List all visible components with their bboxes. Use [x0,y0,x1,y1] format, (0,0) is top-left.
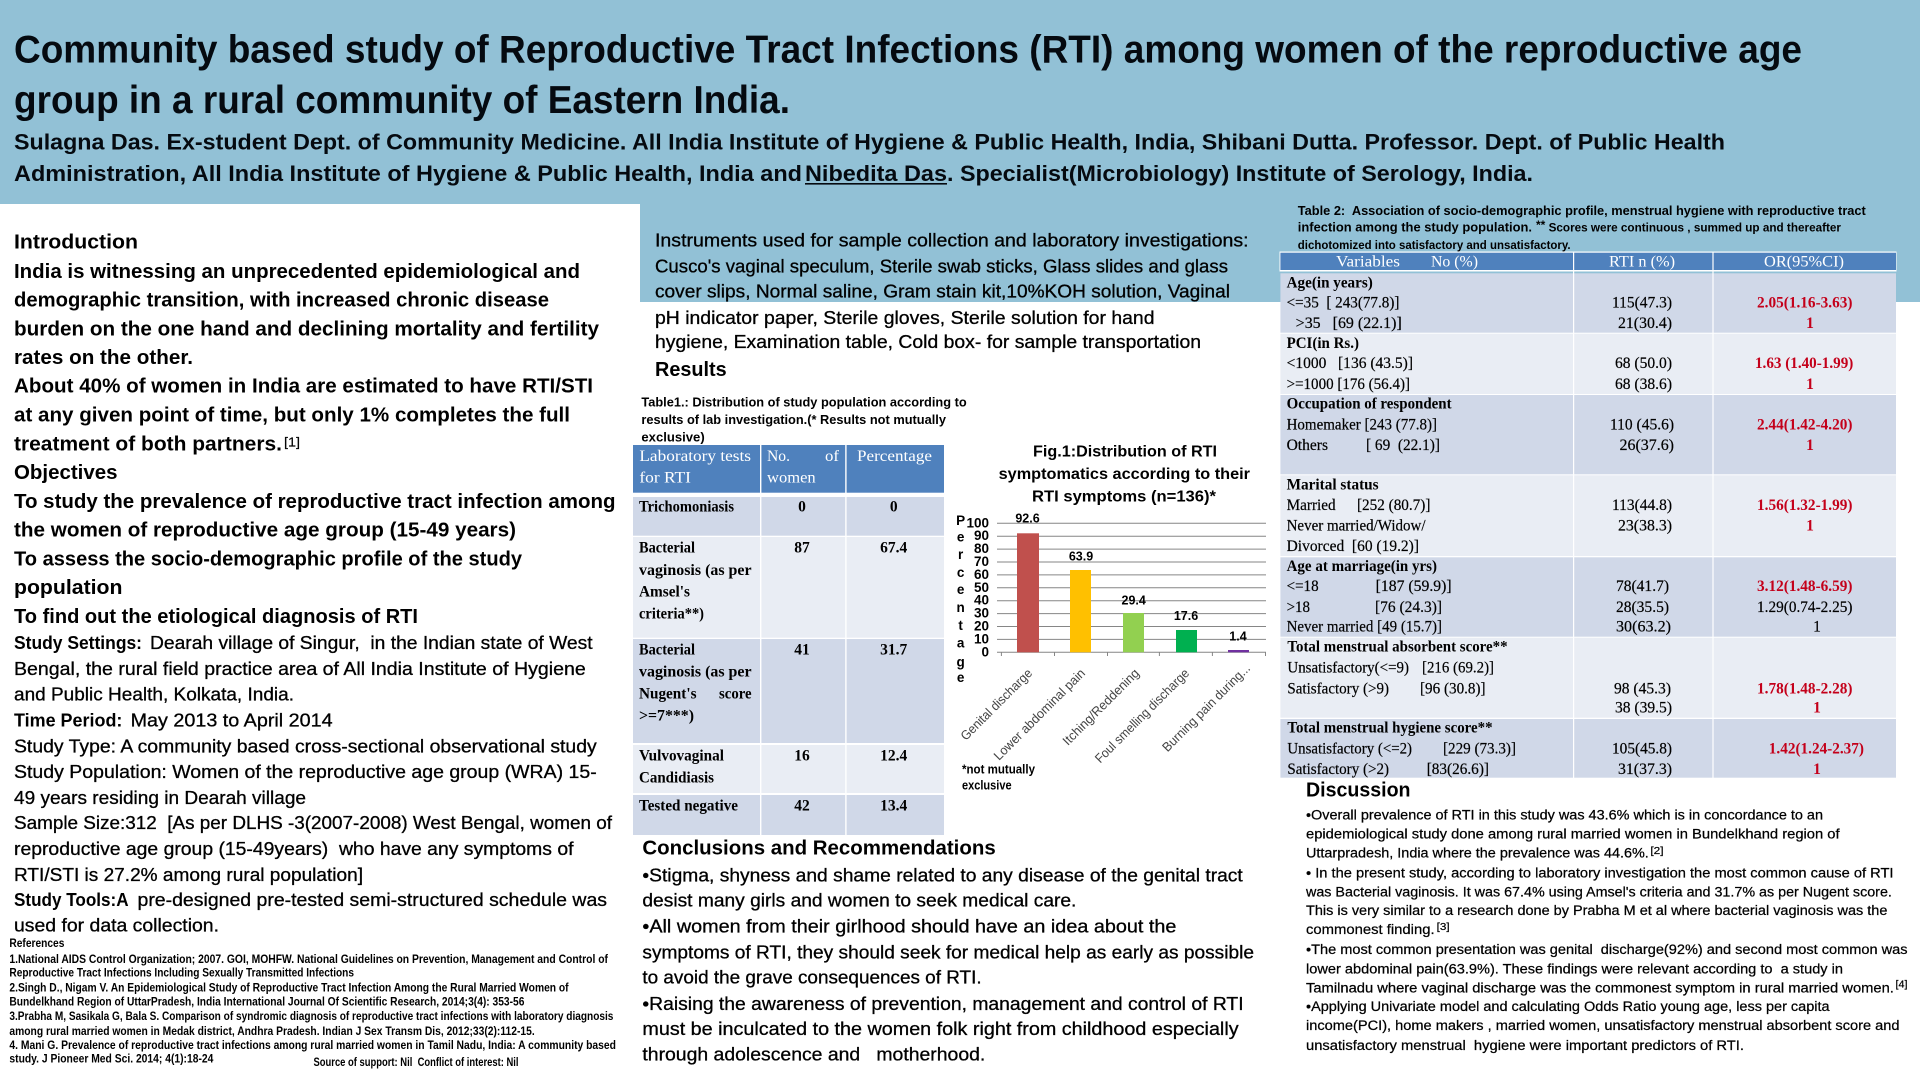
y axis ticks: 40 [974,593,989,608]
figure 1 title [999,444,1250,506]
x axis labels: Itching/Reddening [1059,666,1142,748]
text block: conclusions: symptoms of RTI, they should seek for medical help as early as possible [642,941,1254,962]
x axis labels [957,661,1253,766]
references: Reproductive Tract Infections Including Sexually Transmitted Infections [9,968,354,980]
text block: methods: and Public Health, Kolkata, India. [14,684,294,705]
data labels: 29.4 [1122,594,1146,608]
row group: per capita income: 68 (50.0) [1615,355,1672,372]
text block: discussion: lower abdominal pain(63.9%). These findings were relevant according to a study in [1306,961,1843,977]
panel: middle column [633,230,1266,1065]
text block: introduction: [1] [284,435,300,450]
y axis ticks: 20 [974,618,989,634]
authors [14,130,1725,186]
row group: menstrual absorbent score: [96 (30.8)] [1420,680,1486,697]
table 1: Candidiasis [639,770,714,787]
text block: introduction: treatment of both partners. [14,433,282,456]
row group: per capita income: 68 (38.6) [1615,376,1672,393]
row group: marital status [1287,476,1852,555]
y axis ticks: 10 [974,631,989,646]
row group: age: 21(30.4) [1618,315,1672,332]
text block: methods: Time Period: [14,710,122,731]
y axis title: e [957,530,965,545]
y axis ticks: 100 [966,515,989,530]
text block: conclusions: •Stigma, shyness and shame related to any disease of the genital tract [642,865,1243,886]
text block: discussion: •Overall prevalence of RTI in this study was 43.6% which is in concordance to an [1306,807,1823,823]
chart footnote: exclusive [962,778,1012,792]
row group: age: 2.05(1.16-3.63) [1757,294,1852,311]
text block: instruments: Instruments used for sample collection and laboratory investigations: [655,230,1249,251]
references: among rural married women in Medak district, Andhra Pradesh. Indian J Sex Transm Dis, 2012;33(2):112-15. [9,1026,535,1038]
title: group in a rural community of Eastern India. [14,79,790,122]
row group: menstrual absorbent score: Satisfactory (>9) [1287,680,1389,697]
text block: introduction: burden on the one hand and declining mortality and fertility [14,318,600,341]
row group: per capita income: 1.63 (1.40-1.99) [1755,355,1853,372]
row group: marital status: 1.56(1.32-1.99) [1757,497,1852,514]
table 1: 13.4 [880,798,908,815]
text block: methods: Sample Size:312 [As per DLHS -3(2007-2008) West Bengal, women of [14,812,613,833]
references [9,938,616,1066]
table 1: for RTI [639,470,691,487]
row group: age at marriage: 1 [1813,619,1821,636]
table 1: Tested negative [639,798,738,815]
heading: Objectives: Objectives [14,461,118,484]
text block: methods: Study Population: Women of the reproductive age group (WRA) 15- [14,761,597,782]
source of support note: Source of support: Nil Conflict of interest: Nil [314,1057,518,1069]
table 1: Bacterial [639,540,696,557]
table 2 [1280,252,1896,778]
figure 1 title: Fig.1:Distribution of RTI [1033,444,1217,461]
table 1: Bacterial [639,642,696,659]
table 2 header row: No (%) [1431,254,1478,271]
text block: discussion: was Bacterial vaginosis. It was 67.4% using Amsel's criteria and 31.7% as per Nugent score. [1305,884,1892,900]
references: 3.Prabha M, Sasikala G, Bala S. Comparison of syndromic diagnosis of reproductive tract infections with laboratory diagnosis [9,1011,613,1023]
references: 1.National AIDS Control Organization; 2007. GOI, MOHFW. National Guidelines on Prevention, Management and Control of [9,954,608,966]
row group: marital status: Divorced [60 (19.2)] [1287,538,1419,555]
table 1 caption: Table1.: Distribution of study population according to [641,396,967,410]
references: 4. Mani G. Prevalence of reproductive tract infections among rural married women in Tamil Nadu, India: A community based [9,1040,616,1052]
row group: age: 115(47.3) [1612,294,1672,311]
table 1: criteria**) [639,606,704,623]
table 1: 16 [794,748,810,765]
table 2 caption [1298,204,1867,252]
row group: menstrual hygiene score: [229 (73.3)] [1443,740,1516,757]
text block: discussion: unsatisfactory menstrual hygiene were important predictors of RTI. [1306,1038,1744,1054]
table 1: Nugent's [639,686,696,703]
table 1: 12.4 [880,748,908,765]
row group: age at marriage: 30(63.2) [1616,619,1671,636]
row group: age at marriage: Never married [49 (15.7)] [1287,619,1442,636]
row group: menstrual hygiene score: 1.42(1.24-2.37) [1769,740,1864,757]
row group: menstrual absorbent score: Unsatisfactory(<=9) [1287,659,1409,676]
table 1 caption: exclusive) [641,431,705,445]
row group: menstrual absorbent score [1287,639,1852,717]
row group: per capita income: >=1000 [176 (56.4)] [1287,376,1410,393]
text block: discussion: income(PCI), home makers , married women, unsatisfactory menstrual absorbent score and [1306,1018,1900,1034]
text block: methods: Study Type: A community based cross-sectional observational study [14,736,597,757]
text block: conclusions: must be inculcated to the women folk right from childhood especially [642,1018,1239,1039]
text block: discussion: •Applying Univariate model and calculating Odds Ratio young age, less per capita [1306,999,1830,1015]
row group: menstrual hygiene score: [83(26.6)] [1427,761,1489,778]
table 1 caption [641,396,967,445]
table 1: vaginosis (as per [639,664,752,681]
row group: menstrual hygiene score: 105(45.8) [1612,740,1672,757]
text block: objectives: population [14,576,122,599]
data labels: 17.6 [1174,609,1198,623]
text block: objectives: To assess the socio-demographic profile of the study [14,548,523,571]
authors: . Specialist(Microbiology) Institute of Serology, India. [947,161,1533,186]
row group: occupation: 1 [1806,437,1814,454]
chart footnote [962,762,1035,792]
text block: methods: RTI/STI is 27.2% among rural population] [14,864,363,885]
text block: discussion: •The most common presentation was genital discharge(92%) and second most common was [1306,942,1908,958]
row group: marital status: Never married/Widow/ [1287,518,1426,535]
table 2 caption: ** [1536,218,1546,232]
title [14,29,1802,122]
text block: objectives: To find out the etiological diagnosis of RTI [14,605,418,628]
row group: menstrual hygiene score: 1 [1813,761,1821,778]
text block: methods: used for data collection. [14,915,219,936]
y axis ticks: 60 [974,567,989,582]
text block: instruments: Cusco's vaginal speculum, Sterile swab sticks, Glass slides and glass [655,256,1228,277]
title: Community based study of Reproductive Tract Infections (RTI) among women of the reproductive age [14,29,1802,72]
text block: instruments: cover slips, Normal saline, Gram stain kit,10%KOH solution, Vaginal [655,280,1230,301]
table 1: No. [767,448,790,465]
text block: conclusions: •Raising the awareness of prevention, management and control of RTI [642,993,1244,1014]
text block: discussion [1305,807,1908,1054]
y axis title [956,513,965,685]
row group: per capita income: <1000 [136 (43.5)] [1287,355,1413,372]
text block: methods: May 2013 to April 2014 [131,710,333,731]
text block: instruments: hygiene, Examination table, Cold box- for sample transportation [655,331,1201,352]
row group: age at marriage: 28(35.5) [1616,599,1669,616]
authors: Administration, All India Institute of Hygiene & Public Health, India and [14,161,802,186]
figure 1 title: symptomatics according to their [999,466,1250,483]
y axis title: e [957,670,965,685]
text block: discussion: Uttarpradesh, India where the prevalence was 44.6%. [1306,846,1649,862]
table 1: >=7***) [639,708,694,725]
data labels: 92.6 [1015,512,1040,526]
text block: methods: 49 years residing in Dearah village [14,787,306,808]
heading: Results: Results [655,359,727,381]
data labels: 63.9 [1069,550,1093,564]
text block: introduction: demographic transition, with increased chronic disease [14,289,549,312]
text block: introduction: rates on the other. [14,346,193,369]
row group: age at marriage: Age at marriage(in yrs) [1287,558,1437,575]
data labels: 1.4 [1229,630,1247,644]
table 1: women [767,470,816,487]
text block: introduction: About 40% of women in India are estimated to have RTI/STI [14,375,593,398]
authors: Sulagna Das. Ex-student Dept. of Community Medicine. All India Institute of Hygiene & Public Health, India, Shibani Dutta. Professor. Dept. of Public Health [14,130,1725,154]
text block: conclusions: to avoid the grave consequences of RTI. [642,966,982,987]
row group: marital status: Marital status [1287,476,1379,493]
row group: menstrual absorbent score: 38 (39.5) [1615,700,1672,717]
row group: age: 1 [1806,315,1814,332]
table 2 header row: RTI n (%) [1609,254,1675,271]
table 1 [633,445,944,835]
y axis ticks [966,515,989,659]
y axis title: n [956,600,965,615]
bar chart [956,512,1266,766]
references: study. J Pioneer Med Sci. 2014; 4(1):18-24 [9,1054,214,1066]
table 1: 0 [890,499,898,516]
references: 2.Singh D., Nigam V. An Epidemiological Study of Reproductive Tract Infection Among the Rural Married Women of [9,983,569,995]
text block: methods [14,632,613,936]
row group: menstrual absorbent score: 98 (45.3) [1614,680,1671,697]
table 1: Laboratory tests [639,448,751,465]
table 2 caption: Scores were continuous , summed up and thereafter [1549,223,1842,235]
row group: marital status: 23(38.3) [1618,518,1672,535]
x axis labels: Burning pain during... [1159,661,1253,755]
table 2 caption: infection among the study population. [1298,221,1532,235]
text block: objectives [14,490,616,628]
text block: methods: reproductive age group (15-49years) who have any symptoms of [14,838,574,859]
chart footnote: *not mutually [962,762,1035,776]
table 1: Trichomoniasis [639,499,734,516]
row group: occupation [1287,396,1852,454]
text block: introduction [14,260,600,456]
row group: age at marriage: 1.29(0.74-2.25) [1757,599,1852,616]
row group: age [1287,274,1852,332]
text block: introduction: at any given point of time, but only 1% completes the full [14,404,570,427]
row group: per capita income: 1 [1806,376,1814,393]
row group: menstrual hygiene score [1287,720,1864,778]
table 1: 41 [794,642,810,659]
y axis title: t [958,618,963,633]
table 2 caption: dichotomized into satisfactory and unsatisfactory. [1298,240,1571,252]
y axis ticks: 50 [974,580,989,595]
row group: age at marriage: >18 [1287,599,1310,616]
data labels [1015,512,1247,644]
row group: menstrual hygiene score: Satisfactory (>2) [1287,761,1389,778]
table 1: Amsel's [639,584,690,601]
row group: menstrual hygiene score: 31(37.3) [1618,761,1672,778]
row group: menstrual hygiene score: Total menstrual hygiene score** [1287,720,1493,737]
bars [1017,533,1249,652]
table 2 header row: OR(95%CI) [1764,254,1844,271]
row group: marital status: 113(44.8) [1612,497,1672,514]
y axis ticks: 90 [974,528,989,543]
text block: objectives: the women of reproductive age group (15-49 years) [14,519,516,542]
table 2 header row [1336,254,1844,271]
figure 1 title: RTI symptoms (n=136)* [1032,489,1217,506]
table 1 caption: results of lab investigation.(* Results not mutually [641,413,946,427]
heading: Conclusions and Recommendations: Conclusions and Recommendations [642,837,996,859]
heading: Introduction: Introduction [14,230,138,253]
text block: instruments [655,230,1249,352]
text block: conclusions: desist many girls and women to seek medical care. [642,890,1076,911]
row group: age at marriage: 3.12(1.48-6.59) [1757,578,1852,595]
x axis labels: Foul smelling discharge [1092,666,1192,766]
row group: occupation: Others [1287,437,1328,454]
text block: discussion: epidemiological study done among rural married women in Bundelkhand region of [1306,826,1840,842]
references: References [9,938,64,950]
text block: methods: pre-designed pre-tested semi-structured schedule was [138,889,607,910]
y axis ticks: 70 [974,554,989,569]
text block: discussion: [2] [1650,845,1664,857]
table 1: 0 [798,499,806,516]
table 1: 42 [794,798,810,815]
row group: occupation: 110 (45.6) [1610,416,1674,433]
text block: discussion: commonest finding. [1306,922,1435,938]
row group: age at marriage: 78(41.7) [1616,578,1669,595]
y axis ticks: 30 [974,606,989,621]
row group: age at marriage [1287,558,1852,636]
row group: age: <=35 [ 243(77.8)] [1287,294,1399,311]
row group: age at marriage: [76 (24.3)] [1375,599,1442,616]
row group: age at marriage: [187 (59.9)] [1376,578,1452,595]
table 2 caption: Table 2: Association of socio-demographic profile, menstrual hygiene with reproductive tract [1298,204,1867,218]
text block: discussion: Tamilnadu where vaginal discharge was the commonest symptom in rural married women. [1306,980,1894,996]
heading: Discussion: Discussion [1306,780,1410,802]
table 1: of [825,448,840,465]
text block: discussion: [3] [1437,921,1450,933]
authors: Nibedita Das [805,161,947,186]
y axis title: P [956,513,965,528]
text block: methods: Study Settings: [14,632,142,653]
row group: occupation: 26(37.6) [1620,437,1674,454]
table 1: Vulvovaginal [639,748,725,765]
table 1: score [719,686,752,703]
y axis title: c [957,565,965,580]
row group: menstrual hygiene score: Unsatisfactory (<=2) [1287,740,1412,757]
row group: marital status: [252 (80.7)] [1357,497,1430,514]
header: title and authors [14,29,1802,186]
row group: occupation: 2.44(1.42-4.20) [1757,416,1852,433]
row group: menstrual absorbent score: 1 [1813,700,1821,717]
table 1: 67.4 [880,540,908,557]
text block: instruments: pH indicator paper, Sterile gloves, Sterile solution for hand [655,307,1154,328]
text block: discussion: This is very similar to a research done by Prabha M et al where bacterial vaginosis was the [1306,903,1888,919]
row group: occupation: [ 69 (22.1)] [1366,437,1440,454]
row group: age at marriage: <=18 [1287,578,1319,595]
y axis title: r [958,547,964,562]
text block: discussion: [4] [1896,979,1908,991]
table 1: 87 [794,540,810,557]
y axis ticks: 0 [981,644,989,659]
text block: methods: Study Tools:A [14,889,129,910]
row group: per capita income [1287,335,1853,393]
table 2 header row: Variables [1336,254,1400,271]
panel: left column [9,230,616,1069]
panel: right column [1280,204,1908,1054]
text block: discussion: • In the present study, according to laboratory investigation the most common cause of RTI [1306,865,1894,881]
y axis title: e [957,582,965,597]
y axis ticks: 80 [974,541,989,556]
table 1: 31.7 [880,642,908,659]
x axis labels: Genital discharge [957,666,1035,743]
row group: occupation: Occupation of respondent [1287,396,1452,413]
row group: menstrual absorbent score: [216 (69.2)] [1422,659,1494,676]
row group: marital status: 1 [1806,518,1814,535]
references: Bundelkhand Region of UttarPradesh, India International Journal Of Scientific Research, 2014;3(4): 353-56 [9,997,524,1009]
row group: occupation: Homemaker [243 (77.8)] [1287,416,1437,433]
table 1: Percentage [857,448,932,465]
text block: objectives: To study the prevalence of reproductive tract infection among [14,490,616,513]
x axis labels: Lower abdominal pain [991,666,1088,763]
text block: conclusions [642,865,1254,1065]
text block: conclusions: through adolescence and motherhood. [642,1044,985,1065]
text block: methods: Dearah village of Singur, in the Indian state of West [150,632,593,653]
row group: menstrual absorbent score: 1.78(1.48-2.28) [1757,680,1852,697]
text block: methods: Bengal, the rural field practice area of All India Institute of Hygiene [14,658,586,679]
row group: marital status: Married [1287,497,1336,514]
row group: age: Age(in years) [1287,274,1373,291]
y axis title: a [957,636,965,651]
y axis title: g [956,655,965,670]
text block: conclusions: •All women from their girlhood should have an idea about the [642,916,1176,937]
row group: per capita income: PCI(in Rs.) [1287,335,1359,352]
table 1: vaginosis (as per [639,562,752,579]
text block: introduction: India is witnessing an unprecedented epidemiological and [14,260,580,283]
row group: menstrual absorbent score: Total menstrual absorbent score** [1287,639,1508,656]
row group: age: >35 [69 (22.1)] [1296,315,1402,332]
